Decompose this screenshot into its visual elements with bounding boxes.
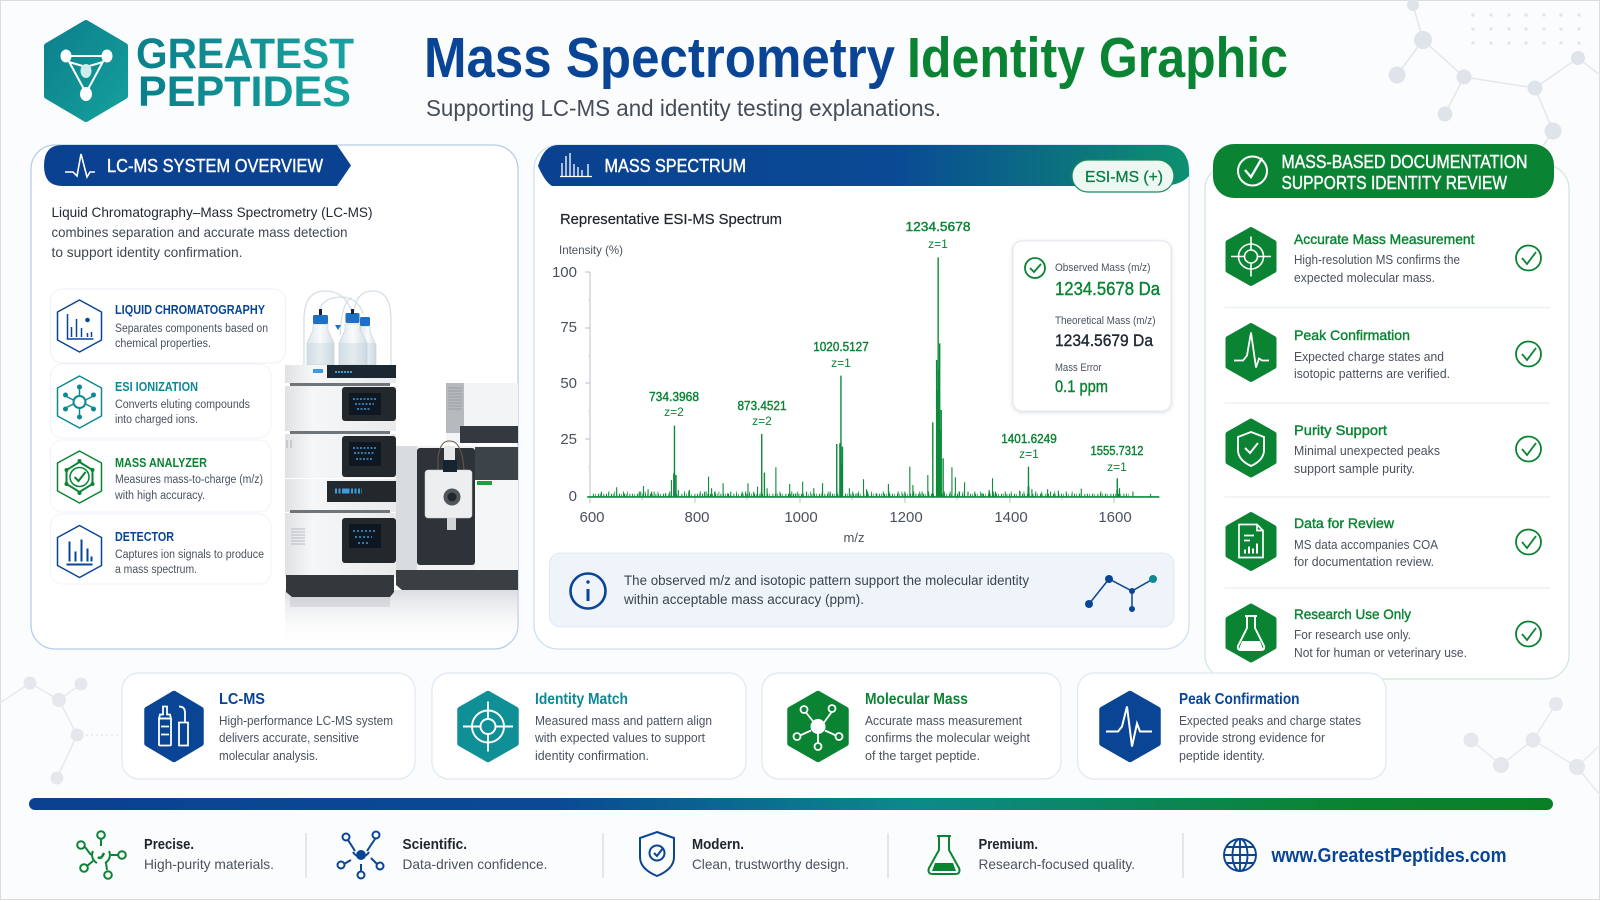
mass result card: Mass Error bbox=[1055, 362, 1102, 374]
logo wordmark bbox=[136, 30, 354, 116]
peak labels: 1234.5678 bbox=[906, 220, 971, 234]
badge: ESI-MS bbox=[1072, 160, 1174, 192]
text: liquid chromatography: LIQUID CHROMATOGRAPHY bbox=[115, 303, 266, 317]
header bbox=[1213, 144, 1554, 198]
spectrum trace bbox=[587, 257, 1159, 497]
mass spectrum chart: Intensity (%) bbox=[559, 243, 623, 257]
mass result card: 1234.5679 Da bbox=[1055, 331, 1153, 350]
logo wordmark: GREATEST bbox=[136, 30, 354, 78]
icon: chromatography hexagon bbox=[58, 300, 102, 352]
icon: globe bbox=[1224, 839, 1256, 871]
solvent bottles bbox=[307, 309, 376, 365]
y axis labels bbox=[552, 264, 577, 505]
x axis title: m/z bbox=[844, 530, 864, 545]
mass result card: 0.1 ppm bbox=[1055, 377, 1108, 396]
icon: check bbox=[1516, 622, 1541, 646]
peak labels: 1401.6249 bbox=[1001, 432, 1057, 446]
ion source bbox=[438, 441, 464, 470]
card: identity match: Measured mass and pattern align bbox=[535, 713, 712, 728]
note box: within acceptable mass accuracy (ppm). bbox=[623, 592, 864, 607]
subtitle: Supporting LC-MS and identity testing explanations. bbox=[426, 95, 941, 121]
HPLC stack bbox=[285, 365, 396, 597]
card: identity match bbox=[432, 673, 746, 779]
x axis labels: 1400 bbox=[994, 509, 1028, 526]
footer: premium: Research-focused quality. bbox=[978, 856, 1135, 872]
footer: website bbox=[1224, 839, 1506, 871]
icon: check bbox=[1516, 436, 1541, 462]
footer: precise: High-purity materials. bbox=[144, 856, 274, 872]
x axis labels: 1200 bbox=[889, 509, 923, 526]
text: ESI ionization bbox=[115, 380, 250, 426]
header banner bbox=[44, 145, 351, 186]
peak labels: z=1 bbox=[1019, 447, 1039, 461]
text: ESI ionization: Converts eluting compounds bbox=[115, 399, 250, 411]
background molecule: lower right bbox=[1464, 697, 1600, 795]
x axis labels: 800 bbox=[684, 509, 710, 526]
intro text: combines separation and accurate mass detection bbox=[52, 224, 348, 240]
peak labels: z=2 bbox=[752, 414, 772, 428]
header: SUPPORTS IDENTITY REVIEW bbox=[1282, 173, 1507, 193]
card: LC-MS: LC-MS bbox=[219, 691, 265, 708]
panel: LC-MS system overview bbox=[31, 145, 518, 649]
axes bbox=[585, 272, 1114, 503]
floor reflection bbox=[285, 590, 518, 638]
icon: shield bbox=[640, 832, 674, 876]
footer: premium: Premium. bbox=[978, 837, 1038, 853]
title: Identity Graphic bbox=[907, 26, 1288, 90]
footer: modern: Modern. bbox=[692, 837, 744, 853]
text: liquid chromatography bbox=[115, 303, 268, 350]
card: identity match: with expected values to support bbox=[534, 730, 705, 745]
card: LC-MS bbox=[122, 673, 415, 779]
mass result card: Theoretical Mass (m/z) bbox=[1055, 315, 1156, 327]
mass spectrometer bbox=[396, 383, 518, 590]
background dot grid bbox=[1471, 13, 1581, 45]
header banner bbox=[538, 145, 1189, 186]
icon: detector hexagon bbox=[58, 526, 102, 578]
icon: ionization hexagon bbox=[58, 376, 102, 428]
item: purity support bbox=[1228, 421, 1541, 476]
panel: mass-based documentation bbox=[1205, 144, 1569, 679]
footer: premium bbox=[928, 836, 1135, 874]
icon: shield bbox=[1228, 421, 1274, 475]
peak labels: 873.4521 bbox=[738, 399, 787, 413]
icon: document bbox=[1228, 514, 1274, 568]
card: LC-MS: High-performance LC-MS system bbox=[219, 713, 393, 728]
item: data for review: MS data accompanies COA bbox=[1294, 538, 1439, 552]
card: detector bbox=[50, 514, 271, 584]
peak labels: 734.3968 bbox=[649, 390, 699, 404]
y axis labels: 100 bbox=[552, 264, 577, 281]
mass result card: Observed Mass (m/z) bbox=[1055, 262, 1150, 274]
icon: mini molecule bbox=[1085, 575, 1157, 612]
icon: green molecule bbox=[77, 831, 126, 879]
item: peak confirmation: Peak Confirmation bbox=[1294, 327, 1410, 343]
icon: info bbox=[570, 574, 606, 608]
logo bbox=[47, 23, 354, 119]
background molecule: lower left bbox=[0, 676, 120, 784]
card: molecular mass: Accurate mass measurement bbox=[865, 713, 1022, 728]
card: LC-MS: delivers accurate, sensitive bbox=[219, 730, 359, 745]
logo hexagon bbox=[47, 23, 125, 119]
icon: target bbox=[460, 694, 516, 760]
tubing bbox=[304, 291, 391, 365]
text: ESI ionization: ESI IONIZATION bbox=[115, 380, 198, 394]
card: LC-MS: molecular analysis. bbox=[219, 748, 318, 763]
footer: website: www.GreatestPeptides.com bbox=[1271, 845, 1506, 867]
x axis labels bbox=[579, 509, 1132, 526]
text: liquid chromatography: Separates components based on bbox=[115, 323, 268, 335]
card: molecular mass: of the target peptide. bbox=[865, 748, 980, 763]
header banner: LC-MS SYSTEM OVERVIEW bbox=[107, 155, 323, 176]
footer bbox=[77, 831, 1507, 879]
footer: precise: Precise. bbox=[144, 837, 194, 853]
text: mass analyzer: Measures mass-to-charge (m/z) bbox=[115, 474, 263, 486]
note box: The observed m/z and isotopic pattern support the molecular identity bbox=[624, 573, 1029, 588]
icon: check bbox=[1516, 246, 1541, 270]
item: accurate mass: High-resolution MS confirms the bbox=[1294, 253, 1460, 267]
text: detector: a mass spectrum. bbox=[115, 564, 197, 576]
note box bbox=[550, 553, 1174, 627]
item: data for review: Data for Review bbox=[1294, 515, 1395, 531]
peak labels: z=1 bbox=[928, 237, 948, 251]
footer: scientific: Scientific. bbox=[402, 837, 467, 853]
item: research use only: For research use only. bbox=[1294, 628, 1411, 642]
header: MASS-BASED DOCUMENTATION bbox=[1282, 152, 1528, 172]
peak labels bbox=[649, 220, 1144, 474]
text: detector bbox=[115, 530, 264, 576]
card: liquid chromatography bbox=[50, 289, 286, 363]
icon: target bbox=[1228, 230, 1274, 284]
item: research use only: Research Use Only bbox=[1294, 606, 1411, 622]
gradient divider bar bbox=[29, 798, 1553, 810]
footer: modern bbox=[640, 832, 849, 876]
x axis labels: 1600 bbox=[1098, 509, 1132, 526]
icon: flask bbox=[928, 836, 960, 874]
card: peak confirmation: provide strong evidence for bbox=[1179, 730, 1326, 745]
footer: scientific bbox=[338, 832, 548, 878]
text: mass analyzer: MASS ANALYZER bbox=[115, 456, 207, 470]
card: molecular mass bbox=[762, 673, 1061, 779]
item: purity support: support sample purity. bbox=[1294, 462, 1415, 476]
panel: mass spectrum bbox=[534, 145, 1189, 649]
text: mass analyzer: with high accuracy. bbox=[114, 490, 205, 502]
item: purity support: Minimal unexpected peaks bbox=[1294, 444, 1440, 458]
peak labels: z=1 bbox=[1107, 460, 1127, 474]
y axis labels: 75 bbox=[560, 319, 577, 336]
mass result card bbox=[1013, 241, 1171, 411]
card: ESI ionization bbox=[50, 364, 271, 438]
peak labels: z=1 bbox=[831, 356, 851, 370]
footer: modern: Clean, trustworthy design. bbox=[692, 856, 849, 872]
card: identity match: Identity Match bbox=[535, 691, 628, 708]
header banner: MASS SPECTRUM bbox=[604, 155, 746, 176]
card: peak confirmation: Peak Confirmation bbox=[1179, 691, 1300, 708]
y axis labels: 50 bbox=[560, 375, 577, 392]
item: peak confirmation: Expected charge states and bbox=[1294, 350, 1444, 364]
item: data for review bbox=[1228, 514, 1541, 569]
x axis labels: 1000 bbox=[784, 509, 818, 526]
item: research use only: Not for human or veterinary use. bbox=[1294, 646, 1467, 660]
card: peak confirmation: Expected peaks and charge states bbox=[1179, 713, 1361, 728]
icon: check bbox=[1516, 342, 1541, 366]
y axis labels: 0 bbox=[569, 488, 577, 505]
intro text: Liquid Chromatography–Mass Spectrometry (LC-MS) bbox=[52, 204, 372, 220]
background molecule: top right bbox=[1388, 0, 1600, 146]
peak labels: 1555.7312 bbox=[1090, 444, 1144, 458]
footer: scientific: Data-driven confidence. bbox=[402, 856, 548, 872]
card: molecular mass: confirms the molecular weight bbox=[865, 730, 1030, 745]
icon: check bbox=[1516, 530, 1541, 554]
footer: precise bbox=[77, 831, 274, 879]
icon: molecule bbox=[790, 694, 846, 760]
chart title: Representative ESI-MS Spectrum bbox=[560, 211, 782, 228]
item: purity support: Purity Support bbox=[1294, 422, 1387, 438]
text: ESI ionization: into charged ions. bbox=[115, 414, 198, 426]
card: identity match: identity confirmation. bbox=[535, 748, 649, 763]
peak labels: 1020.5127 bbox=[813, 340, 869, 354]
text: detector: DETECTOR bbox=[115, 530, 174, 544]
title: Mass Spectrometry bbox=[424, 26, 895, 90]
icon: pulse bbox=[1228, 326, 1274, 380]
intro text bbox=[52, 204, 372, 260]
text: detector: Captures ion signals to produce bbox=[115, 549, 264, 561]
mass spectrum chart bbox=[552, 220, 1159, 545]
logo wordmark: PEPTIDES bbox=[138, 68, 351, 116]
icon: flask bbox=[1228, 606, 1274, 660]
mass result card: 1234.5678 Da bbox=[1055, 279, 1161, 299]
card: mass analyzer bbox=[50, 440, 271, 512]
item: accurate mass bbox=[1228, 230, 1541, 285]
x axis labels: 600 bbox=[579, 509, 605, 526]
card: molecular mass: Molecular Mass bbox=[865, 691, 968, 708]
y axis labels: 25 bbox=[560, 431, 577, 448]
text: liquid chromatography: chemical properties. bbox=[115, 338, 211, 350]
item: research use only bbox=[1228, 606, 1541, 660]
peak labels: z=2 bbox=[664, 405, 684, 419]
card: peak confirmation: peptide identity. bbox=[1179, 748, 1265, 763]
item: accurate mass: expected molecular mass. bbox=[1294, 271, 1435, 285]
icon: analyzer hexagon bbox=[58, 451, 102, 503]
illustration: LC-MS instrument bbox=[285, 291, 518, 647]
intro text: to support identity confirmation. bbox=[52, 244, 242, 260]
text: mass analyzer bbox=[114, 456, 263, 502]
item: accurate mass: Accurate Mass Measurement bbox=[1294, 231, 1475, 247]
icon: verified check bbox=[1025, 258, 1045, 278]
icon: pulse bbox=[1102, 694, 1158, 760]
icon: bottles bbox=[147, 694, 201, 760]
item: data for review: for documentation review. bbox=[1294, 555, 1434, 569]
icon: blue molecule bbox=[338, 832, 384, 878]
badge: ESI-MS: ESI-MS (+) bbox=[1085, 169, 1163, 186]
title bbox=[424, 26, 1288, 90]
item: peak confirmation: isotopic patterns are verified. bbox=[1294, 367, 1450, 381]
card: peak confirmation bbox=[1078, 673, 1386, 779]
item: peak confirmation bbox=[1228, 326, 1541, 381]
